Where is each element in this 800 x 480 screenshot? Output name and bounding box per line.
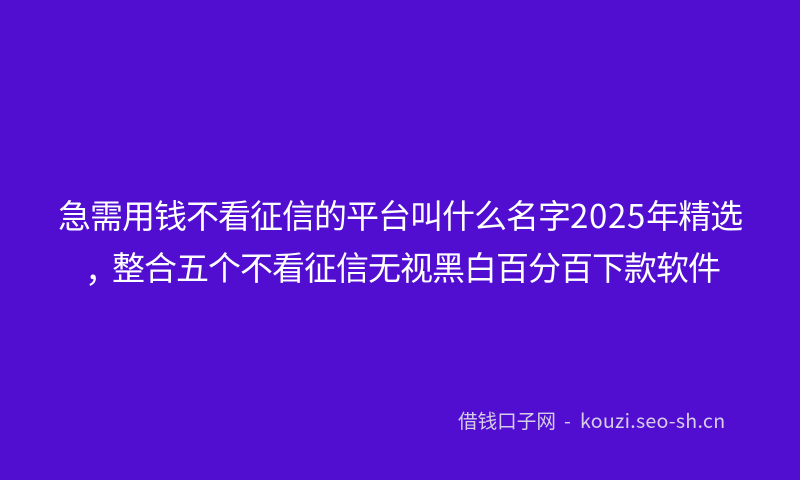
footer source credit: 借钱口子网 — [458, 405, 556, 434]
footer source credit — [458, 405, 725, 434]
footer source credit: kouzi.seo-sh.cn — [580, 405, 725, 434]
title: ，整合五个不看征信无视黑白百分百下款软件 — [85, 242, 720, 292]
footer source credit: - — [564, 405, 571, 434]
title — [58, 190, 742, 292]
title: 急需用钱不看征信的平台叫什么名字2025年精选 — [58, 190, 742, 238]
